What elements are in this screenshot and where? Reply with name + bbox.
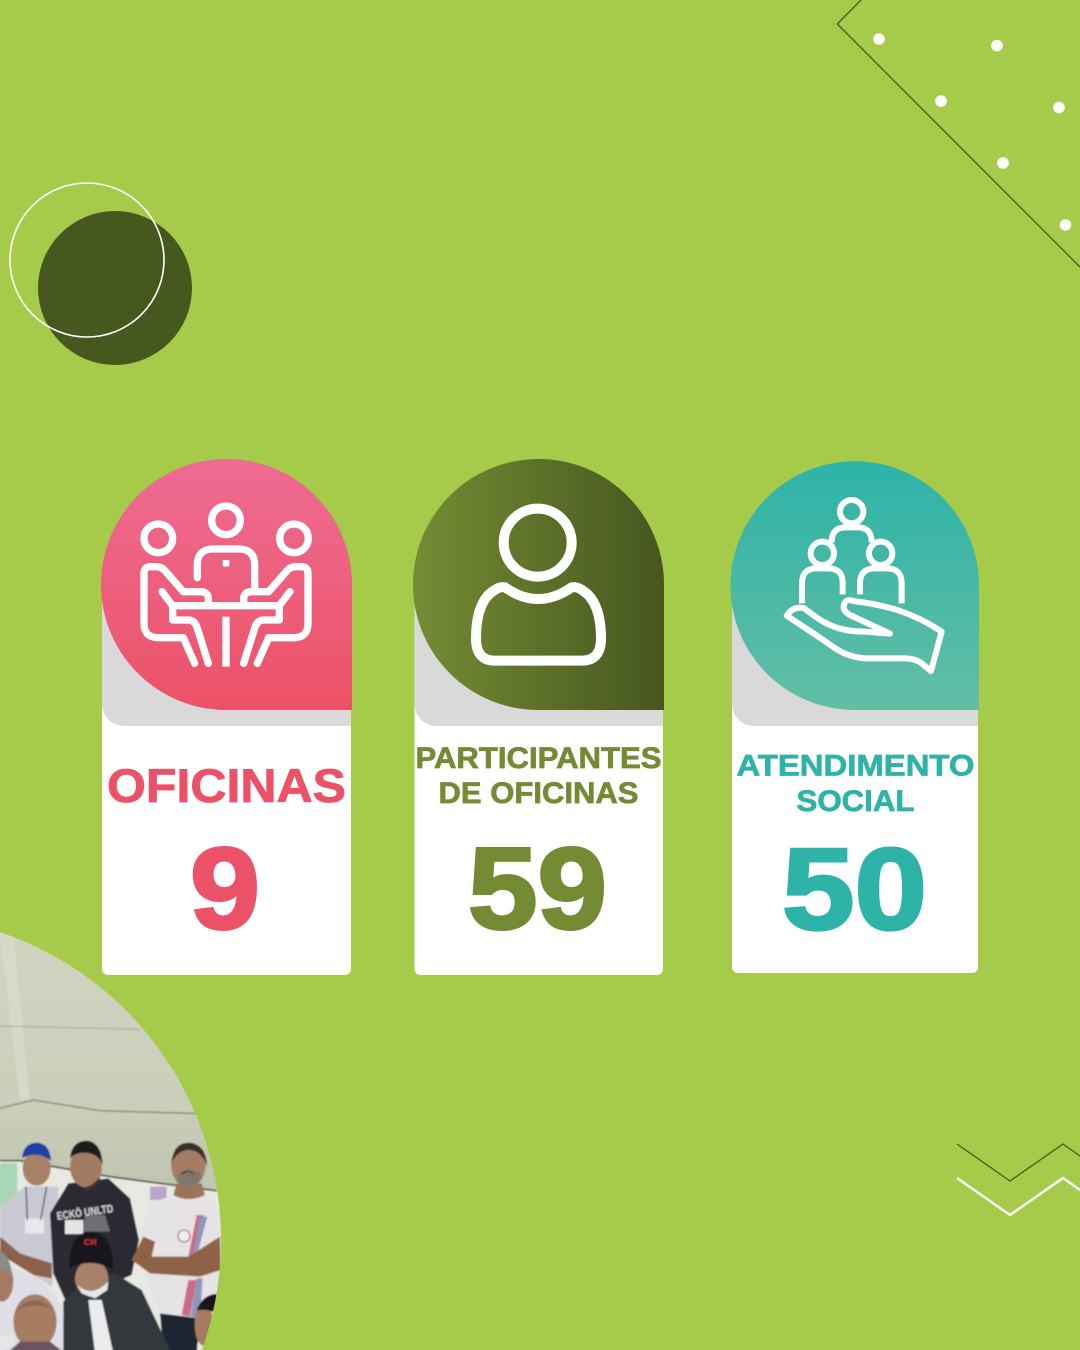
card body	[732, 600, 978, 973]
icon: hand holding people	[787, 500, 942, 671]
olive drop	[413, 459, 664, 710]
man in black hoodie: ECKŌ UNLTD	[56, 1203, 114, 1223]
man with crossed arms	[132, 1143, 221, 1318]
number: 9	[190, 824, 260, 954]
card: oficinas	[101, 459, 352, 975]
number: 59	[468, 824, 607, 954]
card: atendimento social	[730, 461, 979, 973]
card body	[102, 600, 351, 975]
decoration: zigzag lines	[957, 1144, 1080, 1215]
shadow band	[732, 600, 978, 726]
shadow band	[102, 600, 351, 726]
label: PARTICIPANTES	[416, 742, 662, 775]
label: SOCIAL	[796, 785, 914, 818]
man with blue cap	[0, 1143, 58, 1287]
pink drop	[101, 459, 352, 710]
decoration: overlapping circles	[10, 183, 192, 365]
icon: person	[476, 509, 601, 661]
seated man at left	[0, 1250, 63, 1350]
man with black beanie and mask: CH	[84, 1237, 97, 1247]
decoration: corner line with dots	[837, 0, 1080, 267]
card: participantes de oficinas	[413, 459, 664, 975]
label: OFICINAS	[107, 759, 346, 812]
label	[416, 742, 662, 810]
bald man at bottom	[9, 1294, 62, 1350]
jeans and partially hidden person	[160, 1294, 218, 1350]
man with black beanie and mask	[63, 1232, 172, 1350]
man in black hoodie	[50, 1141, 139, 1303]
label: DE OFICINAS	[438, 777, 638, 810]
teal drop	[730, 461, 979, 710]
card body	[414, 600, 663, 975]
shadow band	[414, 600, 663, 726]
photo: group of people under a tent	[0, 932, 221, 1350]
number: 50	[782, 824, 927, 954]
label	[736, 750, 974, 818]
icon: people around a table	[144, 506, 308, 667]
label: ATENDIMENTO	[736, 750, 974, 782]
